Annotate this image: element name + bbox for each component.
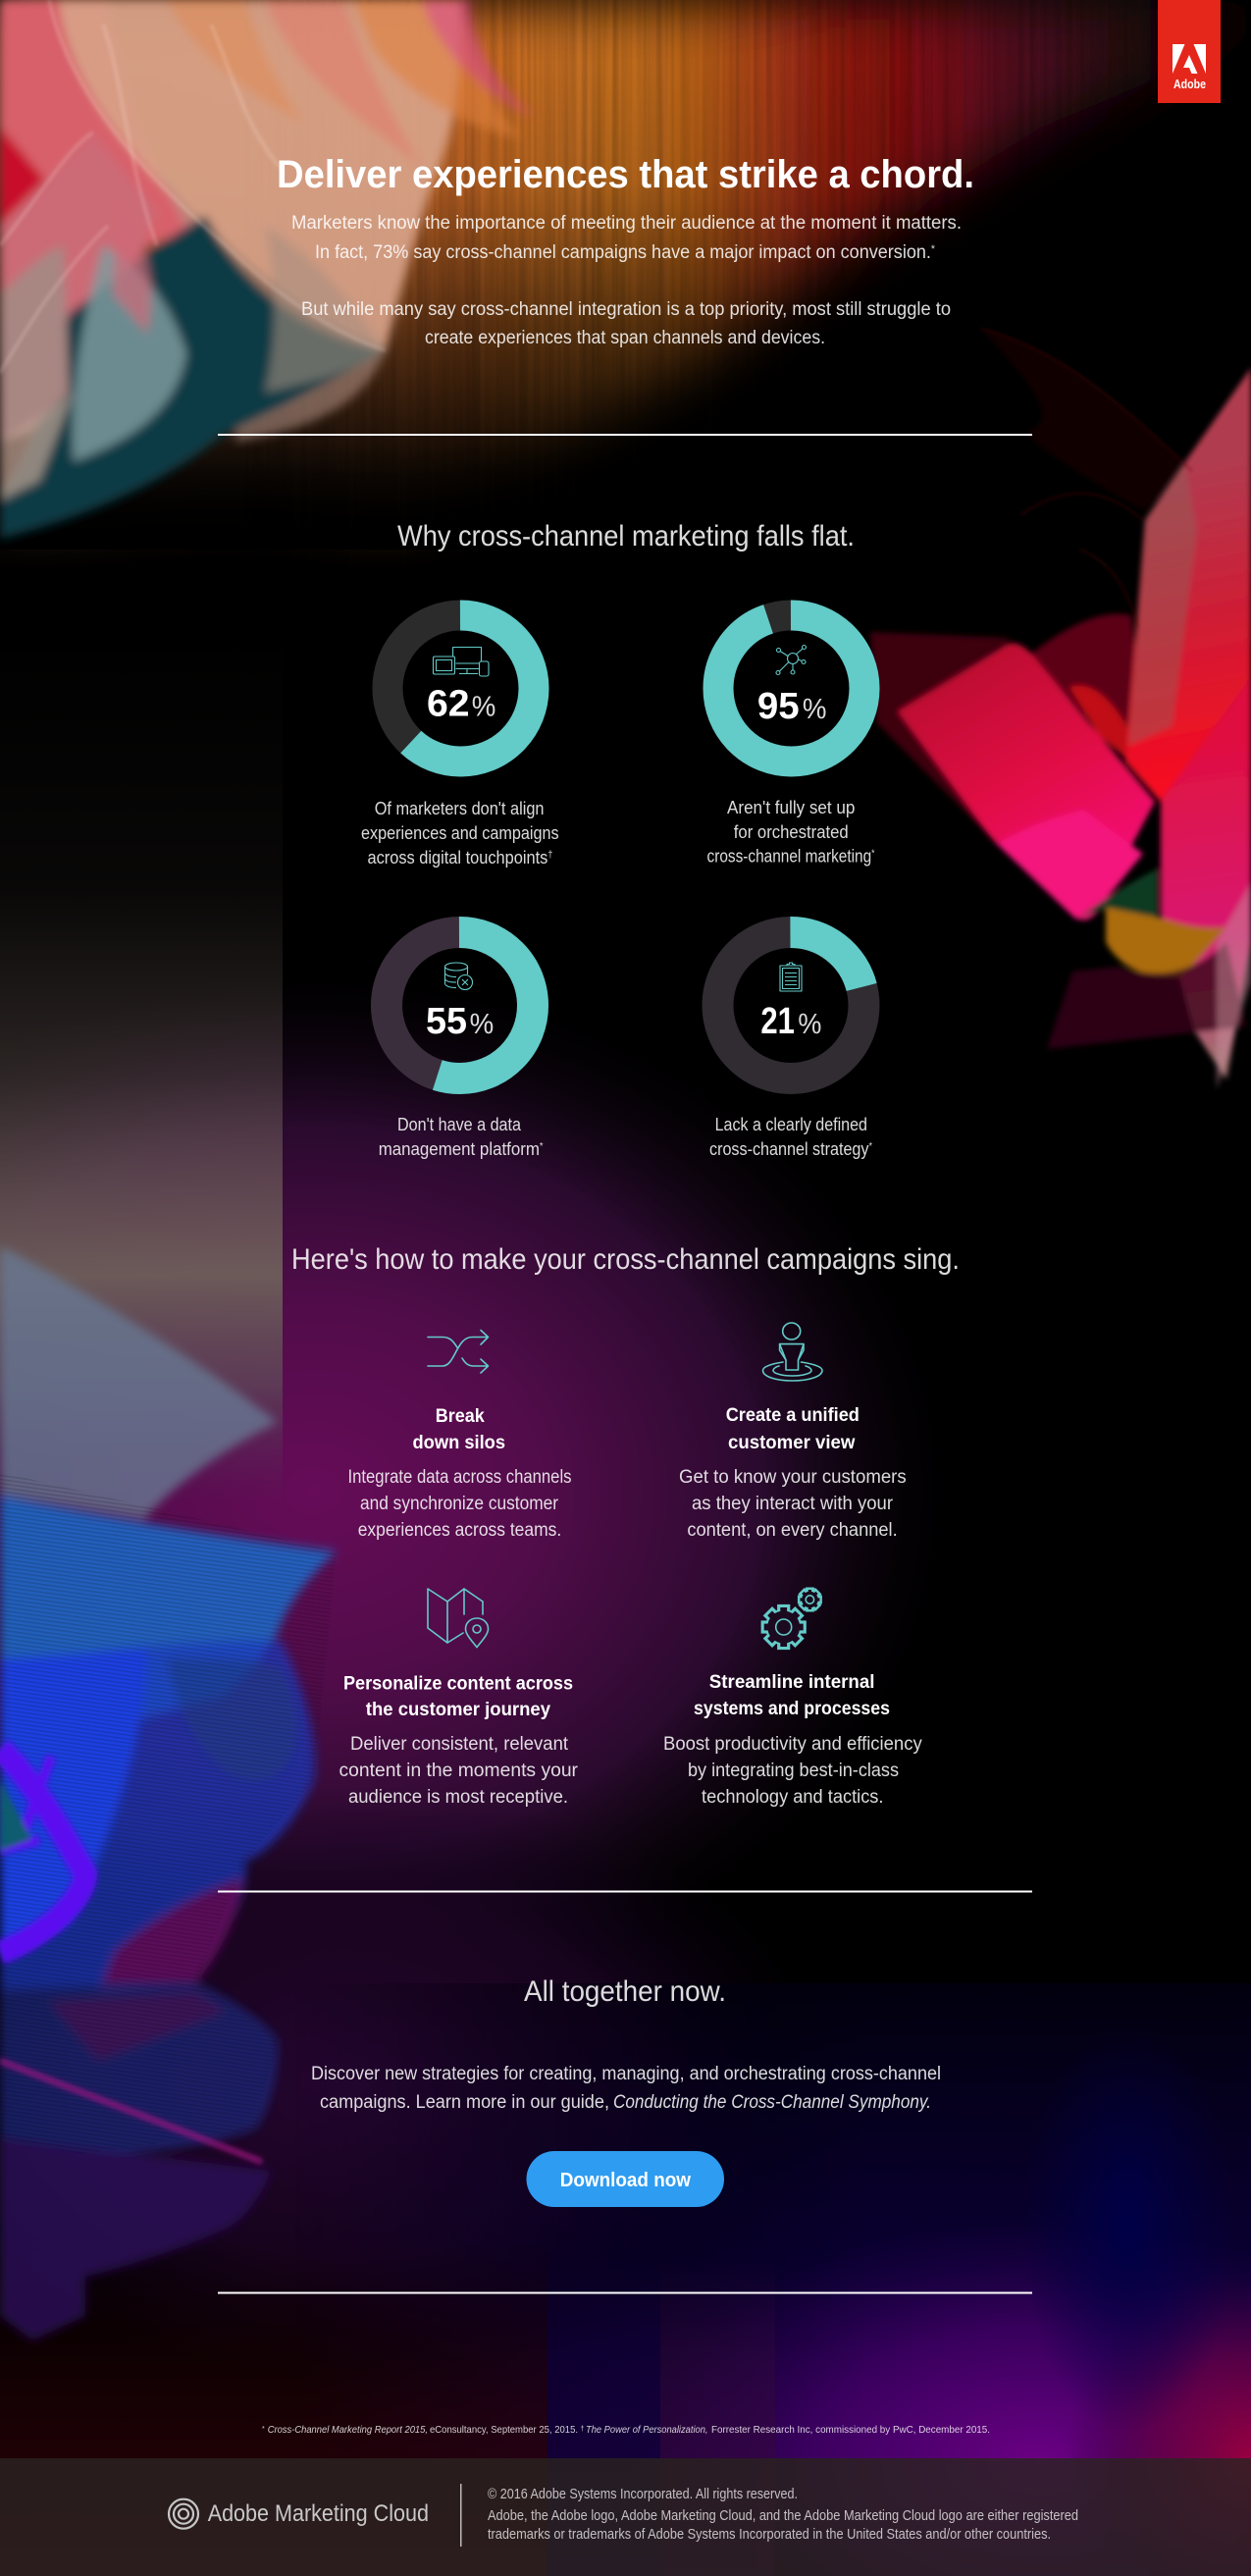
body text: content, on every channel.: [687, 1520, 898, 1541]
subheading: the customer journey: [366, 1700, 550, 1720]
icon: database with x: [445, 963, 473, 989]
caption: [709, 1115, 872, 1159]
call to action text: campaigns. Learn more in our guide,: [320, 2092, 609, 2113]
central purple glow: [0, 972, 952, 2012]
caption: [706, 798, 875, 866]
caption: [361, 799, 559, 867]
footnotes: †: [581, 2426, 585, 2433]
footnotes: Forrester Research Inc, commissioned by PwC, December 2015.: [711, 2424, 990, 2436]
donut chart 55: [387, 932, 533, 1078]
body text: Get to know your customers: [679, 1467, 907, 1488]
icon: map with pin: [428, 1589, 489, 1648]
panel: 62 percent donut stat: [361, 615, 559, 867]
icon: concentric circles: [169, 2499, 198, 2529]
value 62: 62: [427, 683, 470, 724]
donut chart 95: [718, 615, 864, 762]
title: Deliver experiences that strike a chord.: [277, 153, 974, 196]
heading: why it falls flat: Why cross-channel marketing falls flat.: [397, 520, 855, 552]
body text: and synchronize customer: [360, 1494, 559, 1514]
footnotes: [262, 2424, 990, 2436]
subheading: down silos: [412, 1433, 505, 1453]
body text: [339, 1734, 579, 1808]
call to action text: Conducting the Cross-Channel Symphony.: [613, 2092, 931, 2113]
heading: all together now: All together now.: [524, 1975, 726, 2008]
Adobe logo tag: [1158, 0, 1221, 103]
panel: 95 percent donut stat: [706, 615, 875, 866]
intro text block: Marketers know the importance of meeting their audience at the moment it matters.: [291, 213, 962, 234]
donut chart 21: [718, 932, 863, 1078]
footer band: [0, 2458, 1251, 2576]
value 21: 21: [760, 1001, 795, 1042]
heading: how to make campaigns sing: Here's how to make your cross-channel campaigns sing.: [291, 1243, 960, 1276]
icon: devices: [434, 648, 489, 676]
percent sign: %: [798, 1009, 821, 1040]
legal text: trademarks or trademarks of Adobe Systems Incorporated in the United States and/or other countries.: [488, 2526, 1051, 2543]
intro text block: *: [931, 243, 936, 255]
subheading: [412, 1406, 505, 1453]
caption: experiences and campaigns: [361, 823, 559, 843]
body text: Deliver consistent, relevant: [350, 1734, 569, 1755]
subheading: [694, 1672, 890, 1719]
percent sign: %: [803, 694, 826, 725]
icon: clipboard: [780, 963, 802, 991]
icon: Adobe A mark: [1173, 44, 1206, 74]
caption: cross-channel strategy: [709, 1139, 887, 1159]
panel: 21 percent donut stat: [709, 932, 872, 1159]
legal text: [488, 2486, 1078, 2543]
panel: streamline systems: [663, 1589, 922, 1808]
intro text block: But while many say cross-channel integration is a top priority, most still struggle to: [301, 299, 951, 320]
caption: management platform: [379, 1139, 550, 1159]
subheading: Break: [436, 1406, 485, 1427]
icon: person on target: [763, 1323, 822, 1381]
panel: personalize content: [339, 1589, 579, 1808]
subheading: systems and processes: [694, 1699, 890, 1719]
icon: shuffle arrows: [428, 1331, 489, 1373]
legal text: Adobe, the Adobe logo, Adobe Marketing Cloud, and the Adobe Marketing Cloud logo are either registered: [488, 2507, 1078, 2524]
caption: Don't have a data: [397, 1115, 522, 1134]
caption: across digital touchpoints: [367, 848, 566, 867]
subheading: Streamline internal: [709, 1672, 875, 1693]
body text: by integrating best-in-class: [688, 1761, 899, 1781]
intro text block: [291, 213, 962, 348]
download button: Download now: [560, 2170, 691, 2191]
caption: Lack a clearly defined: [715, 1115, 867, 1134]
intro text block: In fact, 73% say cross-channel campaigns have a major impact on conversion.: [315, 242, 964, 263]
caption: *: [871, 848, 875, 860]
subheading: Create a unified: [726, 1405, 860, 1426]
call to action text: [311, 2064, 941, 2113]
Adobe Marketing Cloud logo: Adobe Marketing Cloud: [208, 2500, 429, 2527]
percent sign: %: [470, 1009, 494, 1040]
large gear: [762, 1605, 805, 1649]
small gear: [799, 1589, 820, 1610]
caption: [379, 1115, 544, 1159]
vertical streak texture: [373, 0, 1071, 426]
call to action text: Discover new strategies for creating, managing, and orchestrating cross-channel: [311, 2064, 941, 2084]
subheading: [343, 1674, 573, 1720]
footnotes: *: [262, 2426, 265, 2433]
caption: Aren't fully set up: [727, 798, 855, 817]
violet knot: [0, 1749, 262, 2162]
caption: Of marketers don't align: [375, 799, 544, 818]
body text: content in the moments your: [339, 1761, 579, 1781]
footnotes: Cross-Channel Marketing Report 2015,: [268, 2424, 428, 2436]
caption: *: [540, 1141, 544, 1152]
subheading: [726, 1405, 860, 1453]
donut chart 62: [388, 615, 534, 762]
panel: unified customer view: [679, 1323, 907, 1541]
body text: technology and tactics.: [702, 1787, 883, 1808]
icon: network: [776, 646, 807, 675]
caption: *: [868, 1141, 872, 1152]
legal text: © 2016 Adobe Systems Incorporated. All rights reserved.: [488, 2486, 798, 2502]
right crimson ribbons: [870, 329, 1251, 1089]
percent sign: %: [472, 691, 495, 722]
top orange and red glow: [0, 0, 1251, 510]
intro text block: create experiences that span channels and devices.: [425, 328, 825, 348]
caption: cross-channel marketing: [706, 846, 900, 866]
faint red wisps: [981, 329, 1192, 628]
icon: gears: [762, 1589, 820, 1649]
bottom right navy and magenta glow: [294, 1983, 1251, 2458]
body text: audience is most receptive.: [348, 1787, 568, 1808]
left brown veil: [0, 628, 283, 1276]
top-left silk swirl: [0, 0, 535, 539]
caption: for orchestrated: [734, 822, 849, 842]
body text: as they interact with your: [692, 1494, 894, 1514]
panel: break down silos: [347, 1331, 571, 1541]
footnotes: The Power of Personalization,: [586, 2424, 708, 2436]
body text: Boost productivity and efficiency: [663, 1734, 922, 1755]
footnotes: eConsultancy, September 25, 2015.: [430, 2424, 578, 2436]
body text: [347, 1467, 571, 1541]
body text: [679, 1467, 907, 1541]
subheading: Personalize content across: [343, 1674, 573, 1694]
caption: †: [547, 850, 552, 861]
left blue moire waves: [0, 1246, 337, 2340]
body text: Integrate data across channels: [347, 1467, 571, 1488]
body text: [663, 1734, 922, 1808]
body text: experiences across teams.: [358, 1520, 561, 1541]
panel: 55 percent donut stat: [379, 932, 544, 1159]
value 95: 95: [757, 686, 800, 727]
moire line texture: [0, 1472, 337, 2154]
silk highlight lines: [0, 0, 386, 373]
download button: [526, 2151, 724, 2207]
wordmark: Adobe: [1173, 77, 1206, 91]
subheading: customer view: [728, 1433, 856, 1453]
value 55: 55: [426, 1001, 467, 1042]
